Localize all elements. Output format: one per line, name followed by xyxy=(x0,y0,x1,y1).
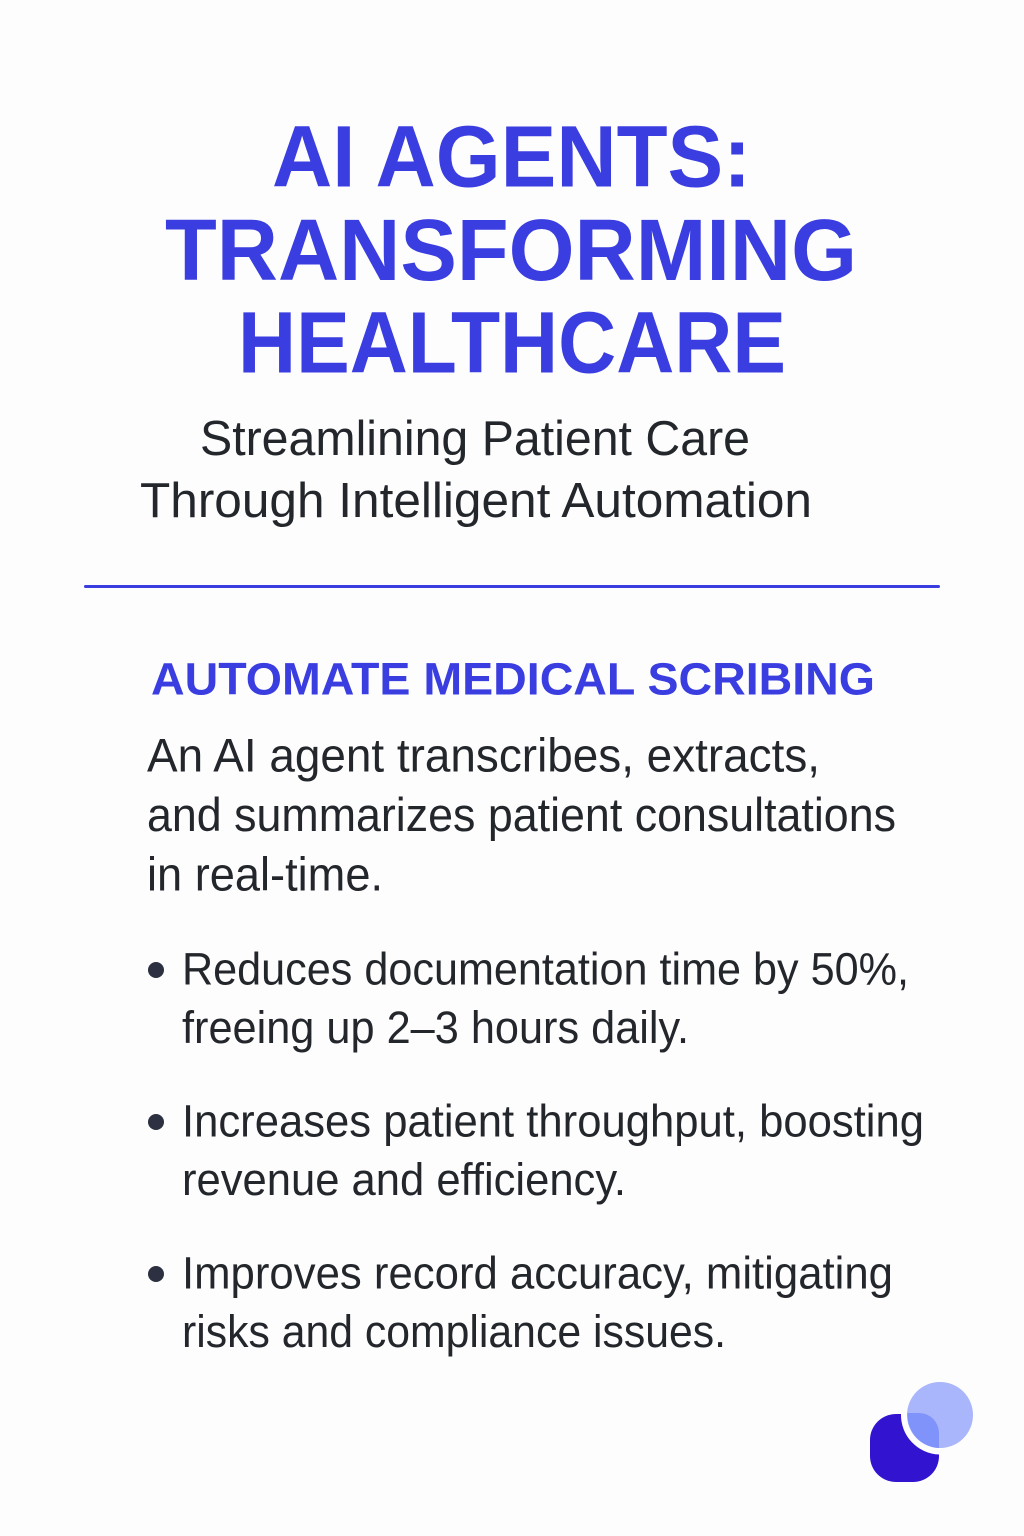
title: AI AGENTS: xyxy=(272,108,751,206)
bullet: patient throughput: Increases patient throughput, boosting xyxy=(182,1096,924,1146)
bullet: record accuracy: Improves record accuracy, mitigating xyxy=(182,1248,893,1298)
bullet: documentation time: freeing up 2–3 hours daily. xyxy=(182,1002,689,1053)
title: HEALTHCARE xyxy=(238,294,786,392)
icon: overlapping shapes logo xyxy=(870,1382,973,1482)
intro paragraph: and summarizes patient consultations xyxy=(147,789,896,842)
section heading: AUTOMATE MEDICAL SCRIBING xyxy=(151,654,875,704)
subtitle xyxy=(140,412,812,528)
subtitle: Through Intelligent Automation xyxy=(140,474,812,528)
bullet: patient throughput xyxy=(148,1096,924,1205)
subtitle: Streamlining Patient Care xyxy=(200,412,750,466)
title xyxy=(165,108,857,392)
intro paragraph xyxy=(147,730,896,902)
bullet: patient throughput: revenue and efficiency. xyxy=(182,1154,626,1205)
bullet: record accuracy: risks and compliance issues. xyxy=(182,1306,726,1357)
intro paragraph: An AI agent transcribes, extracts, xyxy=(147,730,820,782)
bullet: documentation time: Reduces documentation time by 50%, xyxy=(182,944,909,994)
intro paragraph: in real-time. xyxy=(147,848,383,902)
title: TRANSFORMING xyxy=(165,202,857,299)
bullet: documentation time xyxy=(148,944,909,1053)
bullet: record accuracy xyxy=(148,1248,893,1357)
